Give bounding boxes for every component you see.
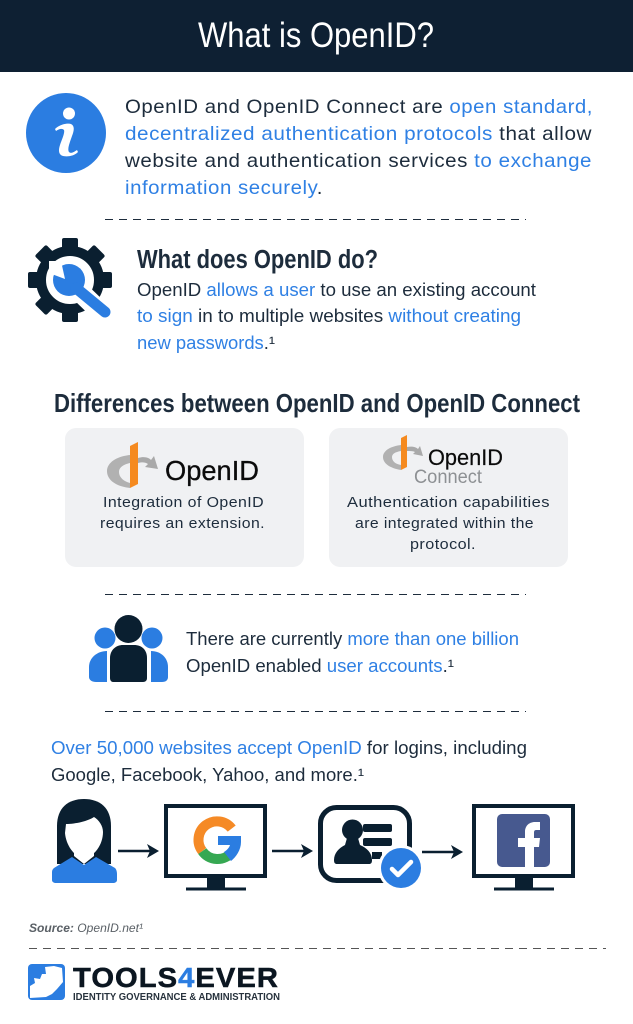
intro text: decentralized authentication protocols that allow — [125, 123, 592, 145]
text: 50,000 websites — [51, 738, 527, 785]
card text — [347, 494, 550, 553]
card text: protocol. — [410, 536, 476, 553]
text: one billion accounts: OpenID enabled user accounts.¹ — [186, 656, 454, 676]
heading: what does OpenID do: What does OpenID do? — [137, 246, 378, 274]
intro text: website and authentication services to exchange — [124, 150, 592, 172]
logo: Tools4ever: IDENTITY GOVERNANCE & ADMINISTRATION — [73, 991, 280, 1003]
panel: OpenID Connect — [329, 428, 568, 567]
icon: info — [26, 93, 106, 173]
logo: OpenID: OpenID — [165, 455, 259, 486]
intro text: information securely . — [125, 177, 323, 199]
arrow — [422, 845, 463, 859]
icon: users — [89, 615, 168, 682]
icon: monitor with Google logo — [166, 806, 265, 890]
text: 50,000 websites: Google, Facebook, Yahoo, and more.¹ — [51, 765, 364, 785]
text: 50,000 websites: Over 50,000 websites accept OpenID for logins, including — [51, 738, 527, 758]
text: what OpenID does: new passwords.¹ — [137, 333, 275, 353]
text: what OpenID does — [137, 280, 536, 353]
card text — [100, 494, 265, 532]
logo: OpenID Connect: Connect — [414, 467, 483, 488]
card text: are integrated within the — [355, 515, 534, 532]
intro text — [124, 96, 593, 199]
icon: gear and wrench — [28, 238, 112, 322]
logo: OpenID Connect — [383, 435, 503, 488]
text: what OpenID does: to sign in to multiple websites without creating — [137, 306, 521, 326]
title banner — [0, 0, 633, 72]
icon: verified ID card — [320, 808, 424, 891]
logo: OpenID — [107, 442, 259, 488]
card text: Authentication capabilities — [347, 494, 550, 511]
intro text: OpenID and OpenID Connect are open standard, — [125, 96, 593, 118]
icon: monitor with Facebook logo — [474, 806, 573, 890]
title banner: What is OpenID? — [198, 16, 434, 55]
card text: requires an extension. — [100, 515, 265, 532]
arrow — [272, 844, 313, 858]
text: one billion accounts: There are currently more than one billion — [186, 629, 519, 649]
logo: OpenID Connect: OpenID — [428, 445, 503, 470]
source: Source: OpenID.net¹ — [29, 921, 143, 935]
arrow — [118, 844, 159, 858]
card text: Integration of OpenID — [103, 494, 264, 511]
text: one billion accounts — [186, 629, 519, 676]
panel: OpenID — [65, 428, 304, 567]
text: what OpenID does: OpenID allows a user to use an existing account — [137, 280, 536, 300]
logo: Tools4ever — [28, 962, 280, 1003]
logo: Tools4ever: TOOLS4EVER — [73, 962, 279, 993]
icon: person — [52, 799, 117, 883]
